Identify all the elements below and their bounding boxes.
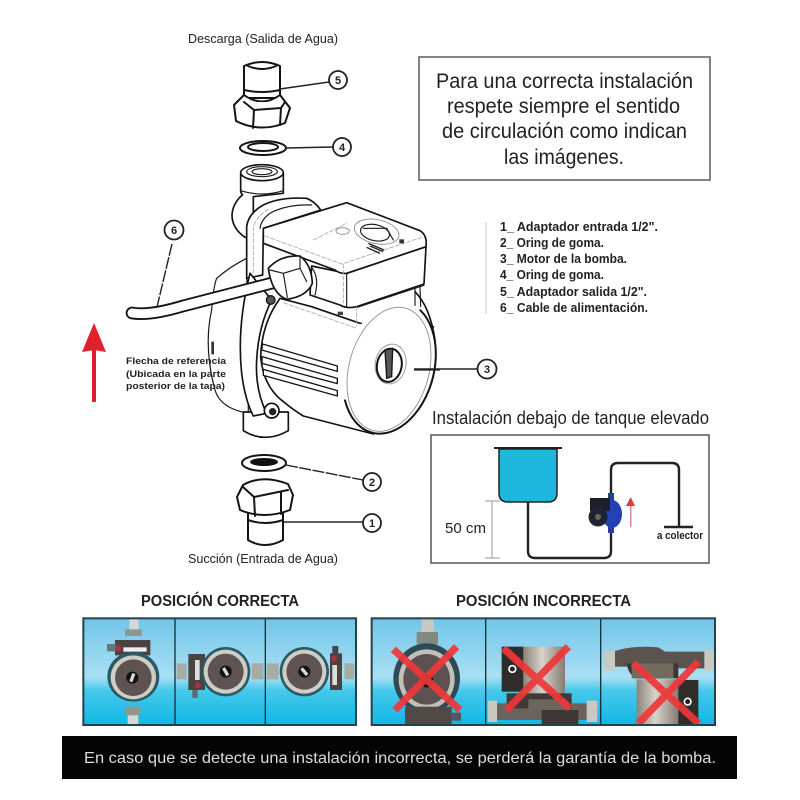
bottom inlet (243, 412, 288, 437)
parts list: 3_ Motor de la bomba. (500, 252, 627, 266)
notice box: las imágenes. (504, 146, 624, 169)
flow marker (211, 342, 214, 354)
parts list: 6_ Cable de alimentación. (500, 301, 648, 315)
vent slots (262, 344, 337, 396)
dial (336, 215, 404, 253)
incorrect pump 1 (393, 618, 461, 725)
warranty warning bar (62, 736, 737, 779)
heading: correct position: POSICIÓN CORRECTA (141, 591, 299, 610)
reference arrow note (126, 356, 227, 391)
rear volute (208, 258, 248, 413)
reference arrow note: posterior de la tapa) (126, 381, 225, 391)
callout: part 6 cable: 6 (171, 225, 177, 237)
parts list: 1_ Adaptador entrada 1/2". (500, 220, 658, 234)
control box lid (263, 203, 426, 273)
red cross (503, 647, 570, 710)
part 5: outlet adapter: 5 (335, 75, 341, 87)
power cable (132, 281, 280, 314)
reference arrow note: (Ubicada en la parte (126, 369, 226, 379)
parts list: 4_ Oring de goma. (500, 268, 604, 282)
notice box: Para una correcta instalación (436, 70, 693, 93)
part 4: o-ring: 4 (339, 142, 346, 154)
part 5: outlet adapter (234, 62, 347, 128)
parts list: 2_ Oring de goma. (500, 236, 604, 250)
flow arrow (626, 497, 635, 527)
collector bar (664, 526, 693, 528)
part 4: o-ring (240, 138, 351, 156)
part 1: inlet adapter: 1 (369, 518, 375, 530)
callout: part 3 motor: 3 (484, 364, 490, 376)
panel: incorrect positions (372, 618, 715, 725)
callout: part 3 motor (414, 360, 496, 378)
red cross (393, 647, 460, 710)
heading: installation under tank: Instalación debajo de tanque elevado (432, 408, 709, 428)
reference arrow note: Flecha de referencia (126, 356, 227, 366)
upper strap (247, 198, 321, 278)
part 2: o-ring (242, 455, 381, 491)
reference arrow (82, 323, 106, 402)
correct pump 2 (177, 647, 264, 698)
part 2: o-ring: 2 (369, 477, 375, 489)
heading: discharge: Descarga (Salida de Agua) (188, 31, 338, 46)
height dimension: 50 cm (445, 520, 486, 537)
top outlet (232, 165, 283, 237)
parts list: 5_ Adaptador salida 1/2". (500, 285, 647, 299)
lower strap (240, 273, 272, 416)
incorrect pump 2 (488, 647, 597, 725)
notice box: de circulación como indican (442, 120, 687, 143)
pipework (528, 463, 679, 558)
collector label: a colector (657, 530, 704, 542)
part 1: inlet adapter (237, 479, 381, 545)
notice box (419, 57, 710, 180)
parts list (486, 220, 658, 315)
tank installation diagram (431, 435, 709, 563)
heading: suction: Succión (Entrada de Agua) (188, 551, 338, 566)
warranty warning bar: En caso que se detecte una instalación incorrecta, se perderá la garantía de la bomba. (84, 750, 716, 767)
height dimension (445, 501, 500, 558)
notice box: respete siempre el sentido (447, 95, 680, 118)
bolts (264, 296, 279, 418)
tank (494, 448, 562, 502)
motor housing (261, 291, 450, 444)
heading: incorrect position: POSICIÓN INCORRECTA (456, 591, 631, 610)
correct pump 3 (267, 646, 354, 696)
panel: correct positions (83, 618, 356, 725)
mini pump (588, 493, 622, 533)
correct pump 1 (107, 618, 159, 725)
control box sides (310, 247, 426, 308)
front screw (372, 342, 409, 386)
pump illustration (132, 165, 450, 444)
leader to part 3 (414, 368, 440, 372)
incorrect pump 3 (604, 647, 713, 725)
red cross (633, 662, 698, 723)
cable gland (268, 256, 317, 299)
callout: part 6 cable (157, 220, 184, 307)
